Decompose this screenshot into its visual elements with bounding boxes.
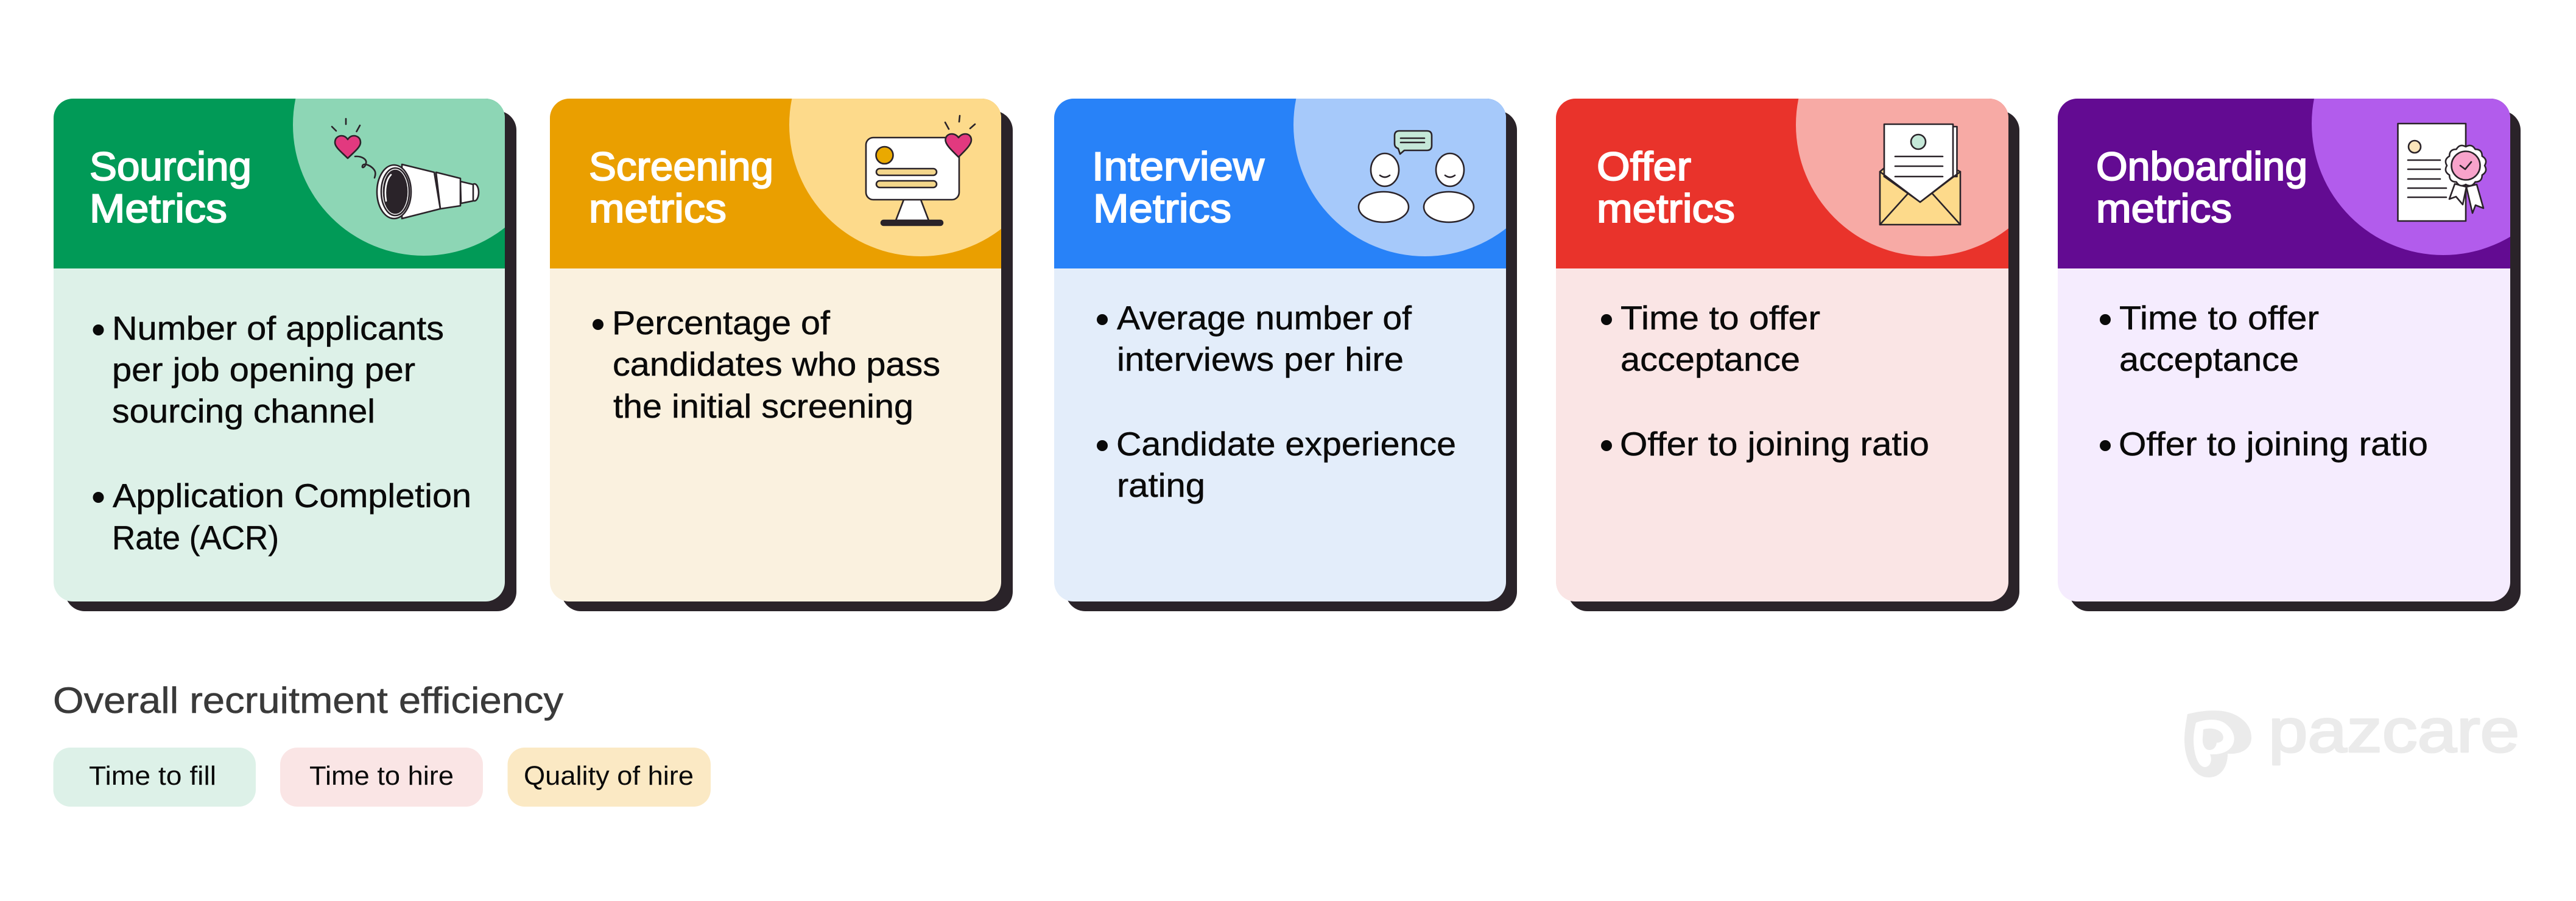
text: interview bullets: interviews per hire	[1117, 340, 1404, 378]
heading: sourcing metrics	[90, 144, 252, 231]
logo mark	[2184, 710, 2251, 777]
pill: time to fill	[54, 748, 256, 807]
text: onboarding bullets: Time to offer	[2119, 299, 2319, 337]
icon: telescope with heart	[332, 119, 479, 219]
text: screening bullets: Percentage of	[612, 304, 831, 342]
heading: interview metrics: Interview	[1092, 144, 1264, 189]
heading: offer metrics	[1597, 144, 1735, 231]
icon: certificate with rosette	[2398, 124, 2486, 221]
text: screening bullets: candidates who pass	[613, 345, 940, 383]
text: interview bullets: rating	[1117, 466, 1205, 504]
heading: sourcing metrics: Sourcing	[90, 144, 252, 189]
pill: quality of hire: Quality of hire	[524, 761, 694, 791]
text: sourcing bullets: sourcing channel	[112, 392, 375, 430]
panel: onboarding metrics	[2058, 99, 2521, 611]
heading: interview metrics: Metrics	[1093, 186, 1231, 231]
icon: envelope with offer letter	[1880, 124, 1960, 225]
heading: screening metrics	[589, 144, 773, 231]
panel: screening metrics	[550, 99, 1013, 611]
heading: onboarding metrics: Onboarding	[2096, 144, 2307, 189]
heading: interview metrics	[1092, 144, 1264, 231]
heading: overall recruitment efficiency: Overall recruitment efficiency	[53, 680, 563, 721]
text: offer bullets	[1601, 299, 1929, 463]
infographic canvas	[54, 99, 2521, 807]
panel: sourcing metrics	[54, 99, 516, 611]
text: offer bullets: Offer to joining ratio	[1620, 425, 1929, 463]
logo wordmark: pazcare	[2268, 697, 2519, 765]
text: sourcing bullets: Application Completion	[113, 477, 471, 514]
text: interview bullets: Average number of	[1117, 299, 1412, 337]
logo: pazcare	[2184, 697, 2519, 777]
heading: onboarding metrics	[2096, 144, 2307, 231]
pill: time to hire	[280, 748, 483, 807]
text: sourcing bullets	[93, 309, 471, 556]
text: sourcing bullets: per job opening per	[112, 351, 415, 388]
text: onboarding bullets: acceptance	[2119, 340, 2299, 378]
heading: onboarding metrics: metrics	[2096, 186, 2232, 231]
text: onboarding bullets: Offer to joining ratio	[2119, 425, 2428, 463]
pill: time to fill: Time to fill	[89, 761, 216, 791]
pill: quality of hire	[508, 748, 711, 807]
text: onboarding bullets	[2100, 299, 2428, 463]
text: sourcing bullets: Number of applicants	[112, 309, 444, 347]
text: interview bullets: Candidate experience	[1116, 425, 1456, 463]
text: screening bullets	[593, 304, 940, 425]
text: offer bullets: Time to offer	[1621, 299, 1820, 337]
text: sourcing bullets: Rate (ACR)	[112, 519, 279, 556]
heading: offer metrics: metrics	[1597, 186, 1735, 231]
heading: screening metrics: Screening	[589, 144, 773, 189]
pill: time to hire: Time to hire	[309, 761, 454, 791]
heading: offer metrics: Offer	[1597, 144, 1691, 189]
heading: screening metrics: metrics	[589, 186, 727, 231]
icon: monitor with heart	[866, 116, 975, 225]
panel: interview metrics	[1054, 99, 1517, 611]
panel: offer metrics	[1556, 99, 2019, 611]
text: interview bullets	[1097, 299, 1456, 504]
heading: sourcing metrics: Metrics	[90, 186, 227, 231]
text: screening bullets: the initial screening	[613, 387, 913, 425]
text: offer bullets: acceptance	[1621, 340, 1800, 378]
icon: two people talking	[1359, 131, 1474, 222]
